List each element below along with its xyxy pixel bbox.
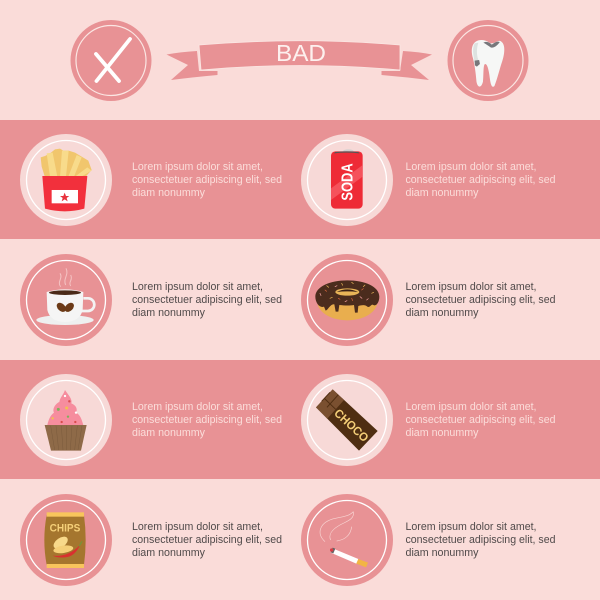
panel: donut <box>301 254 393 346</box>
band: row 3 <box>0 360 600 479</box>
icon: french fries <box>41 149 92 211</box>
text: fries <box>132 161 282 199</box>
text: cupcake: diam nonummy <box>132 427 205 439</box>
text: chips <box>132 521 282 559</box>
text: donut: Lorem ipsum dolor sit amet, <box>406 281 536 293</box>
text: coffee: diam nonummy <box>132 307 205 319</box>
text: chocolate: diam nonummy <box>406 427 479 439</box>
panel: fries <box>20 134 112 226</box>
text: donut: diam nonummy <box>406 307 479 319</box>
text: chips: diam nonummy <box>132 547 205 559</box>
text: soda: diam nonummy <box>406 187 479 199</box>
text: fries: consectetuer adipiscing elit, sed <box>132 174 282 186</box>
icon: chocolate bar: CHOCO <box>331 406 371 445</box>
icon: chips bag: CHIPS <box>50 522 81 534</box>
panel: soda <box>301 134 393 226</box>
icon: cigarette <box>320 512 368 567</box>
text: cupcake <box>132 401 282 439</box>
banner: BAD ribbon <box>166 40 432 80</box>
text: coffee <box>132 281 282 319</box>
text: soda: Lorem ipsum dolor sit amet, <box>406 161 536 173</box>
text: chocolate: consectetuer adipiscing elit, sed <box>406 414 556 426</box>
panel: coffee <box>20 254 112 346</box>
text: fries: Lorem ipsum dolor sit amet, <box>132 161 263 173</box>
icon: cupcake <box>45 390 87 451</box>
panel: chips <box>20 494 112 586</box>
text: cigarette: Lorem ipsum dolor sit amet, <box>406 521 536 533</box>
text: donut: consectetuer adipiscing elit, sed <box>406 294 556 306</box>
text: cigarette: diam nonummy <box>406 547 479 559</box>
text: chips: consectetuer adipiscing elit, sed <box>132 534 282 546</box>
text: cigarette: consectetuer adipiscing elit, sed <box>406 534 556 546</box>
panel: chocolate <box>301 374 393 466</box>
heading: BAD <box>276 40 326 66</box>
panel: cupcake <box>20 374 112 466</box>
band: row 1 <box>0 120 600 239</box>
text: fries: diam nonummy <box>132 187 205 199</box>
text: coffee: Lorem ipsum dolor sit amet, <box>132 281 263 293</box>
text: chocolate <box>406 401 556 439</box>
icon: coffee cup <box>36 268 94 325</box>
icon: soda can: SODA <box>339 163 356 201</box>
panel: cigarette <box>301 494 393 586</box>
text: coffee: consectetuer adipiscing elit, sed <box>132 294 282 306</box>
icon: crossed-out badge <box>70 20 152 101</box>
text: cupcake: Lorem ipsum dolor sit amet, <box>132 401 263 413</box>
text: soda <box>406 161 556 199</box>
icon: decayed tooth badge <box>448 20 528 101</box>
text: cupcake: consectetuer adipiscing elit, sed <box>132 414 282 426</box>
text: chips: Lorem ipsum dolor sit amet, <box>132 521 263 533</box>
text: donut <box>406 281 556 319</box>
text: chocolate: Lorem ipsum dolor sit amet, <box>406 401 536 413</box>
text: soda: consectetuer adipiscing elit, sed <box>406 174 556 186</box>
text: cigarette <box>406 521 556 559</box>
icon: donut <box>315 280 379 320</box>
